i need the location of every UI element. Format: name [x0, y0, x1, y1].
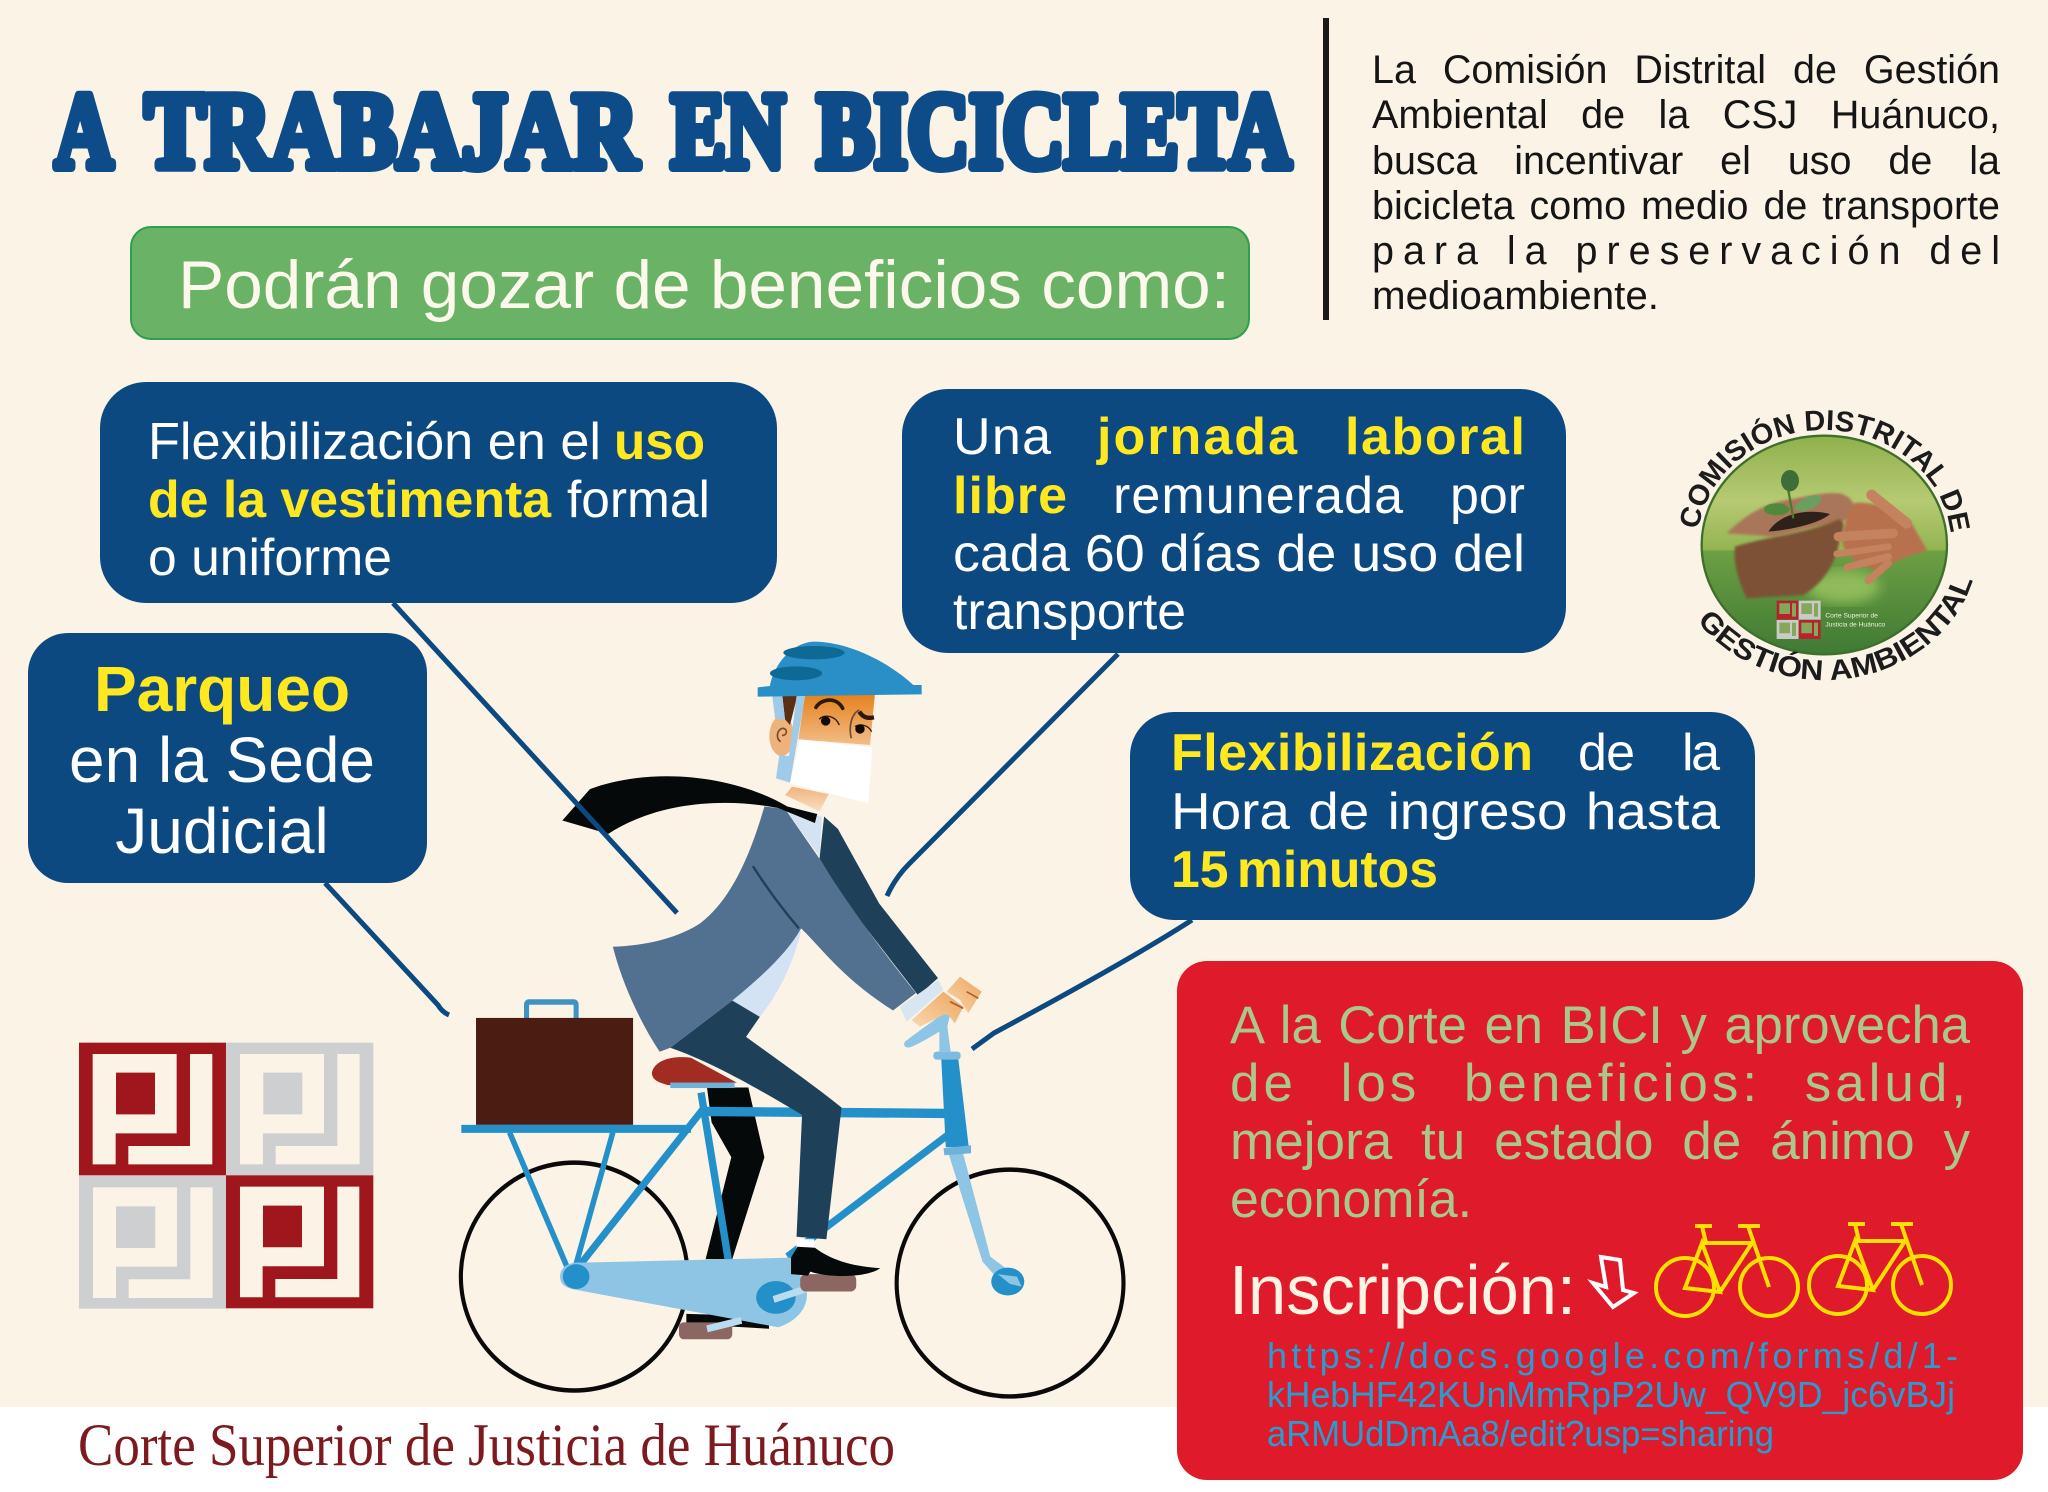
vertical divider and intro paragraph: para la preservación del — [1372, 229, 2000, 273]
benefits banner: Podrán gozar de beneficios como: — [178, 247, 1230, 323]
callout: hora de ingreso — [1130, 712, 1755, 920]
registration URL: https://docs.google.com/forms/d/1- — [1267, 1335, 1958, 1376]
call to action text: economía. — [1230, 1170, 1472, 1229]
registration URL — [1267, 1335, 1958, 1454]
callout: vestimenta — [100, 382, 777, 603]
handlebar — [904, 1013, 951, 1052]
stem collar — [933, 1052, 961, 1060]
call to action text: de los beneficios: salud, — [1230, 1054, 1970, 1113]
cyclist hand on handlebar — [900, 977, 982, 1060]
callout: jornada laboral: jornada — [1096, 408, 1298, 466]
callout: parqueo: Parqueo — [94, 653, 350, 725]
callout: hora de ingreso: de — [1578, 724, 1635, 782]
registration URL: aRMUdDmAa8/edit?usp=sharing — [1267, 1413, 1774, 1454]
cyclist head and helmet — [758, 642, 922, 803]
callout: parqueo: en la Sede — [69, 724, 375, 796]
emblem hands and seedling — [1727, 470, 1927, 598]
footer institution name: Corte Superior de Justicia de Huánuco — [78, 1412, 895, 1478]
callout: jornada laboral: cada 60 días de uso del — [953, 525, 1525, 583]
vertical divider and intro paragraph: Ambiental de la CSJ Huánuco, — [1372, 93, 2000, 137]
commission emblem — [1680, 410, 1973, 680]
callout: jornada laboral: por — [1450, 467, 1525, 525]
callout: hora de ingreso: Flexibilización — [1171, 724, 1533, 782]
cyclist illustration — [461, 776, 1123, 1396]
saddle — [652, 1057, 737, 1088]
icon: yellow bicycle — [1656, 1226, 1798, 1316]
callout: hora de ingreso: 15 minutos — [1171, 841, 1438, 899]
callout: jornada laboral: laboral — [1345, 408, 1525, 466]
callout: jornada laboral — [902, 389, 1566, 653]
emblem small caption — [1825, 612, 1886, 629]
title: BICICLETA — [817, 72, 1291, 191]
far sleeve — [820, 816, 938, 996]
vertical divider and intro paragraph: La Comisión Distrital de Gestión — [1372, 48, 2000, 92]
callout: parqueo — [28, 633, 427, 883]
ear — [769, 716, 794, 756]
vertical divider and intro paragraph: busca incentivar el uso de la — [1372, 139, 2000, 183]
bicycle wheels — [461, 1163, 1123, 1396]
near leg — [670, 1001, 842, 1239]
emblem ring text: COMISIÓN DISTRITAL DE — [1680, 410, 1970, 532]
registration label: Inscripción: — [1229, 1251, 1576, 1329]
face mask — [790, 739, 872, 803]
helmet straps — [772, 695, 805, 783]
emblem small PJ mark — [1777, 601, 1821, 639]
emblem small caption: Justicia de Huánuco — [1825, 622, 1886, 629]
callout: jornada laboral: transporte — [953, 583, 1186, 641]
icon: down arrow — [1593, 1257, 1634, 1307]
call to action text: A la Corte en BICI y aprovecha — [1230, 996, 1971, 1055]
head tube and fork — [941, 1058, 1024, 1295]
vertical divider and intro paragraph — [1323, 18, 2000, 320]
neck — [785, 787, 829, 811]
helmet — [758, 642, 922, 697]
shirt — [732, 809, 822, 1017]
necktie — [562, 776, 817, 834]
bicycle frame and rack — [461, 1093, 948, 1267]
cuff — [900, 980, 943, 1022]
far sole — [679, 1322, 732, 1339]
emblem small caption: Corte Superior de — [1825, 612, 1878, 619]
far leg — [686, 1088, 769, 1329]
benefits banner — [131, 227, 1249, 339]
jacket — [613, 807, 916, 1052]
near shoe — [791, 1239, 880, 1291]
callout: jornada laboral: libre — [953, 467, 1067, 525]
emblem disc — [1702, 436, 1947, 654]
hair — [782, 696, 797, 725]
title: TRABAJAR — [145, 72, 639, 191]
PJ logo — [79, 1043, 373, 1309]
vertical divider and intro paragraph: bicicleta como medio de transporte — [1372, 184, 2000, 228]
callout: hora de ingreso: Hora de ingreso hasta — [1171, 783, 1720, 841]
title: A — [55, 72, 113, 191]
call to action text — [1230, 996, 1971, 1229]
hand — [912, 977, 982, 1027]
callout: hora de ingreso: la — [1682, 724, 1720, 782]
callout: parqueo: Judicial — [115, 795, 329, 867]
emblem ring text — [1680, 410, 1973, 680]
title — [55, 72, 1291, 191]
callout: vestimenta: Flexibilización en el — [148, 413, 601, 471]
connector lines — [325, 603, 1192, 1049]
title: EN — [671, 72, 785, 191]
registration URL: kHebHF42KUnMmRpP2Uw_QV9D_jc6vBJj — [1267, 1374, 1955, 1415]
face — [798, 693, 875, 745]
chain guard — [560, 1258, 807, 1329]
vertical divider and intro paragraph: medioambiente. — [1372, 274, 1659, 318]
callout: jornada laboral: Una — [953, 408, 1051, 466]
callout: vestimenta: formal — [567, 471, 710, 529]
call to action text: mejora tu estado de ánimo y — [1230, 1112, 1970, 1171]
briefcase — [476, 1002, 633, 1125]
red call to action panel — [1177, 961, 2023, 1480]
callout: vestimenta: o uniforme — [148, 529, 392, 587]
icon: yellow bicycle — [1809, 1224, 1951, 1314]
callout: vestimenta: de la vestimenta — [148, 471, 552, 529]
emblem ring text: GESTIÓN AMBIENTAL — [1701, 580, 1973, 680]
callout: vestimenta: uso — [614, 413, 705, 471]
callout: jornada laboral: remunerada — [1113, 467, 1403, 525]
